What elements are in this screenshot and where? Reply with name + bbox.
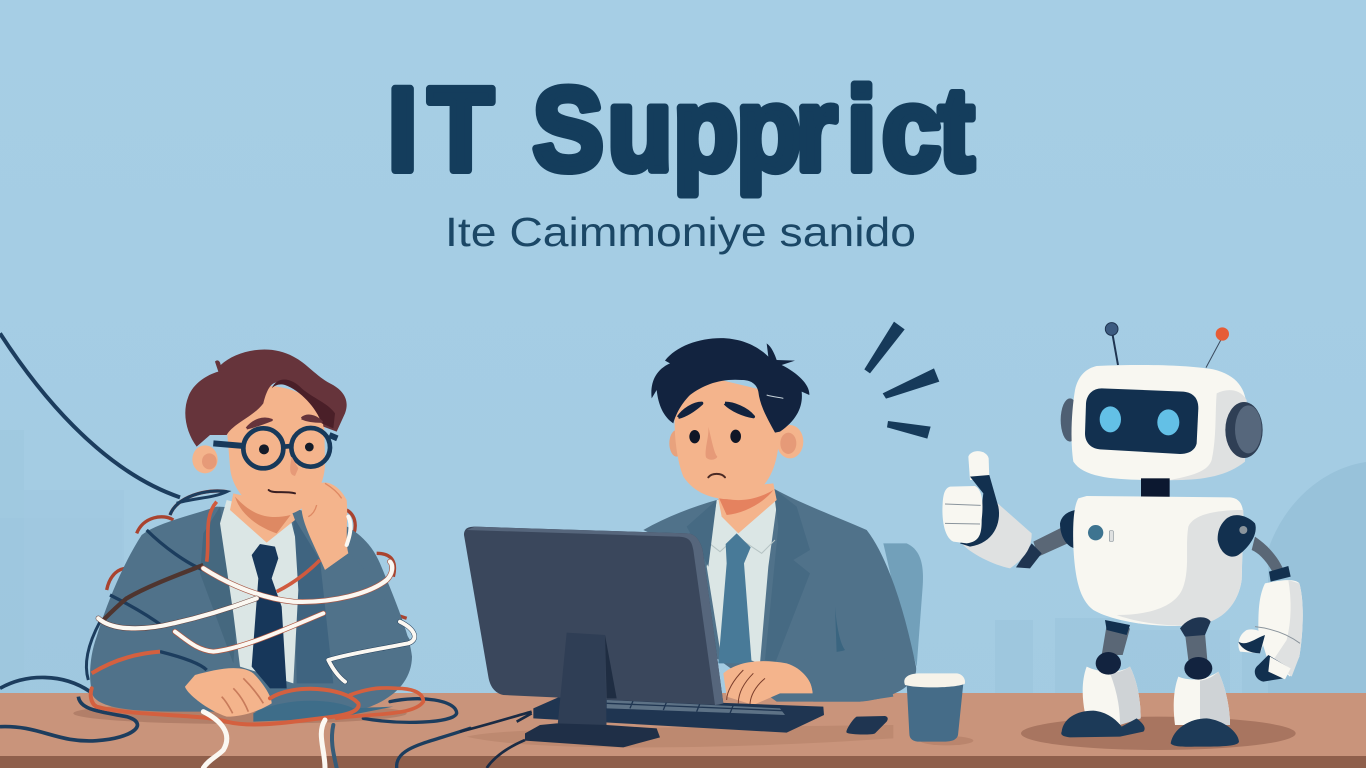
hand on cheek [302, 482, 348, 570]
hair [651, 338, 809, 433]
left ear [1061, 398, 1079, 442]
right leg [1185, 633, 1207, 660]
hanging cable [0, 333, 180, 497]
coffee cup [904, 673, 973, 745]
keyboard keys [607, 700, 785, 715]
visor [1085, 388, 1198, 454]
nose and mouth [706, 427, 717, 460]
hair [185, 349, 347, 447]
jacket sleeve [793, 647, 893, 702]
monitor [464, 527, 723, 705]
character: man tangled in cables [0, 333, 470, 768]
robot [942, 323, 1303, 750]
right arm [1252, 537, 1285, 577]
monitor base [525, 723, 660, 747]
surprise marks [864, 322, 939, 439]
neck [230, 493, 295, 543]
desk [0, 693, 1366, 768]
shirt [707, 493, 778, 663]
character: worried man at computer [460, 322, 939, 768]
robot fingers [1238, 629, 1267, 653]
robot eyes [1100, 406, 1121, 432]
lower hand [185, 668, 272, 717]
shirt [220, 500, 298, 683]
face [225, 386, 325, 515]
background dome [1268, 462, 1366, 693]
jacket shading [293, 517, 333, 683]
left desk cables [0, 677, 137, 741]
tie [718, 533, 752, 663]
left leg [1102, 625, 1130, 655]
jacket [643, 488, 916, 702]
neck [717, 483, 777, 533]
hand [723, 661, 813, 705]
red cable on chest [207, 502, 320, 592]
desk cable tangle [91, 688, 470, 768]
collar lines [709, 537, 775, 553]
antennas [1112, 333, 1118, 365]
desk shadow [73, 703, 407, 724]
head [1072, 365, 1247, 480]
orange sleeve cable [92, 652, 160, 673]
left arm [1033, 523, 1072, 557]
eyes [689, 430, 700, 443]
tie [252, 544, 287, 688]
robot shadow [1021, 717, 1296, 750]
dark cables on chest [110, 530, 207, 670]
chair [883, 543, 923, 667]
brows [678, 403, 753, 417]
jacket [90, 507, 412, 712]
raised hand [962, 497, 1032, 568]
torso [1073, 496, 1243, 626]
left leg boot [1083, 667, 1141, 725]
chest indicators [1088, 525, 1103, 540]
left foot [1061, 711, 1145, 737]
monitor stand [557, 633, 607, 735]
nose and mouth [290, 457, 298, 476]
brows [247, 416, 322, 428]
desk shadow [467, 725, 893, 747]
phone [846, 716, 888, 735]
right knee [1184, 657, 1212, 680]
right ear [1225, 402, 1263, 458]
glasses [213, 428, 337, 468]
title: IT Supprict [388, 63, 974, 195]
eyes [259, 444, 269, 454]
background skyline [0, 430, 1366, 693]
white cables [98, 517, 415, 682]
back cables [107, 491, 407, 618]
ears [669, 430, 684, 457]
monitor cables [460, 712, 532, 768]
left knee [1096, 652, 1121, 675]
subtitle: Ite Caimmoniye sanido [445, 209, 916, 255]
face [675, 377, 779, 499]
sleeve cuff [325, 553, 410, 663]
right foot [1171, 718, 1239, 747]
ear [192, 445, 218, 473]
keyboard [533, 697, 824, 733]
neck [1141, 478, 1170, 499]
lapels [765, 488, 810, 663]
right leg boot [1174, 672, 1230, 725]
